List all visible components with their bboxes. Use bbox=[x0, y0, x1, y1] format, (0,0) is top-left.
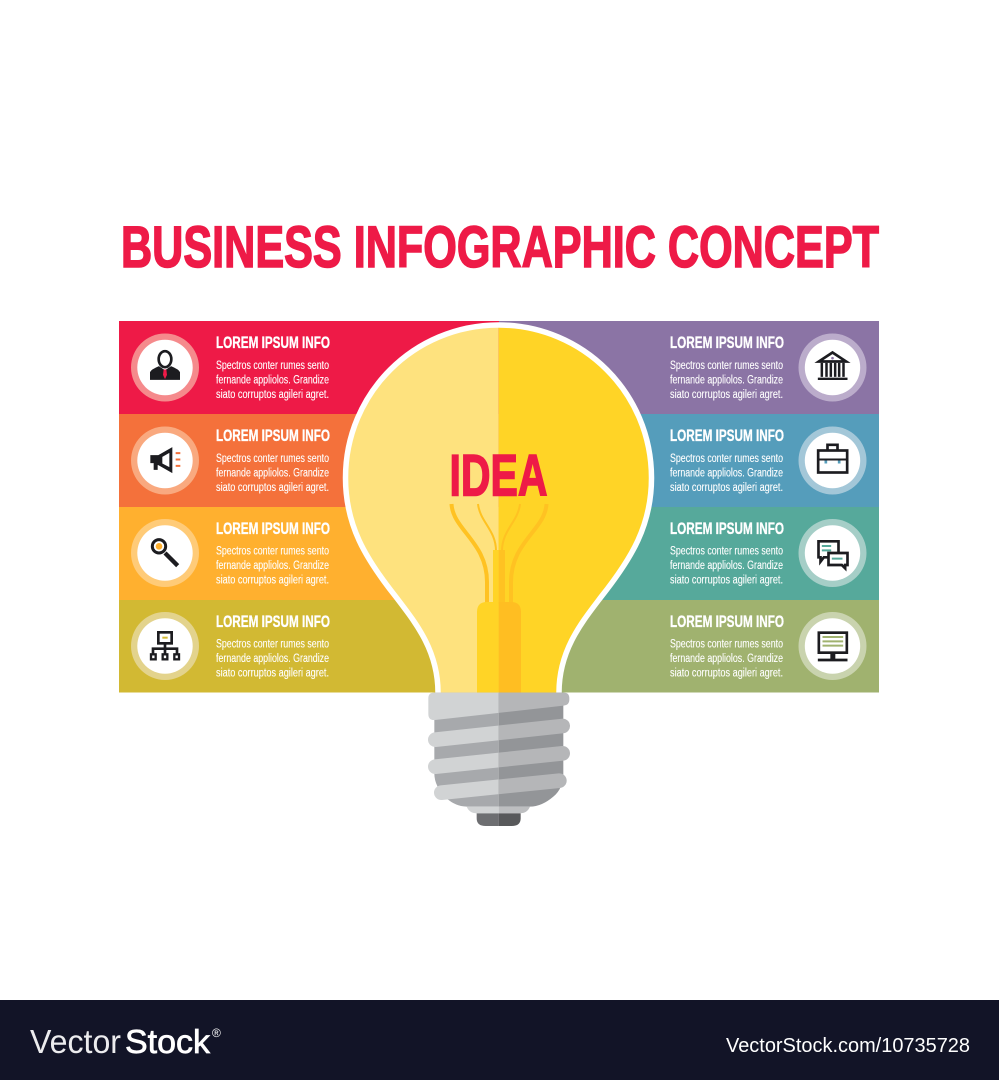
text: right row 3: siato corruptos agileri agret. bbox=[670, 574, 783, 586]
text: right row 4 bbox=[670, 613, 784, 680]
text: row 3: siato corruptos agileri agret. bbox=[216, 574, 329, 586]
icon: megaphone bbox=[150, 447, 180, 473]
bulb stem bbox=[477, 602, 521, 692]
text: row 1: LOREM IPSUM INFO bbox=[216, 334, 330, 352]
text: right row 1: Spectros conter rumes sento bbox=[670, 360, 783, 372]
text: row 3 bbox=[216, 520, 330, 586]
ring badge bbox=[131, 334, 199, 402]
text: row 4: fernande appliolos. Grandize bbox=[216, 653, 329, 665]
text: right row 4: Spectros conter rumes sento bbox=[670, 638, 783, 650]
text: right row 1 bbox=[670, 334, 784, 401]
text: row 1 bbox=[216, 334, 330, 401]
ring badge bbox=[131, 426, 199, 494]
panel: right row 3 teal bbox=[499, 507, 879, 600]
text: right row 1: LOREM IPSUM INFO bbox=[670, 334, 784, 352]
panel: right row 1 purple bbox=[499, 321, 879, 414]
icon: magnifier bbox=[152, 540, 178, 566]
text: right row 4: siato corruptos agileri agret. bbox=[670, 668, 783, 680]
text: right row 3: fernande appliolos. Grandize bbox=[670, 560, 783, 572]
ring badge bbox=[798, 426, 866, 494]
footer logo bbox=[30, 1023, 221, 1060]
icon: monitor bbox=[818, 633, 847, 660]
footer logo: Vector bbox=[30, 1023, 121, 1060]
ring badge bbox=[798, 612, 866, 680]
text: row 3: fernande appliolos. Grandize bbox=[216, 560, 329, 572]
icon: bank bbox=[818, 353, 847, 379]
text: row 3: Spectros conter rumes sento bbox=[216, 546, 329, 558]
text: right row 1: siato corruptos agileri agret. bbox=[670, 389, 783, 401]
light bulb glass bbox=[346, 325, 652, 692]
filament bbox=[452, 504, 546, 604]
text: row 1: Spectros conter rumes sento bbox=[216, 360, 329, 372]
text: right row 2: LOREM IPSUM INFO bbox=[670, 427, 784, 445]
text: right row 3 bbox=[670, 520, 784, 586]
text: right row 1: fernande appliolos. Grandize bbox=[670, 374, 783, 386]
footer logo: ® bbox=[212, 1026, 221, 1040]
footer image id: VectorStock.com/10735728 bbox=[726, 1035, 970, 1057]
panel: left row 1 red bbox=[119, 321, 499, 414]
text: right row 2: Spectros conter rumes sento bbox=[670, 453, 783, 465]
text: row 2: Spectros conter rumes sento bbox=[216, 453, 329, 465]
text: row 4 bbox=[216, 613, 330, 680]
ring badge bbox=[798, 334, 866, 402]
text: row 4: siato corruptos agileri agret. bbox=[216, 668, 329, 680]
text: row 2: LOREM IPSUM INFO bbox=[216, 427, 330, 445]
text: row 3: LOREM IPSUM INFO bbox=[216, 520, 330, 538]
text: right row 2 bbox=[670, 427, 784, 494]
text: right row 2: siato corruptos agileri agret. bbox=[670, 482, 783, 494]
ring badge bbox=[131, 612, 199, 680]
text: right row 3: Spectros conter rumes sento bbox=[670, 546, 783, 558]
panel: left row 3 amber bbox=[119, 507, 499, 600]
panel: left row 2 orange bbox=[119, 414, 499, 507]
text: right row 4: LOREM IPSUM INFO bbox=[670, 613, 784, 631]
footer logo: Stock bbox=[125, 1023, 210, 1060]
text: row 2 bbox=[216, 427, 330, 494]
text: row 4: Spectros conter rumes sento bbox=[216, 638, 329, 650]
idea label: IDEA bbox=[450, 444, 548, 508]
text: row 1: siato corruptos agileri agret. bbox=[216, 389, 329, 401]
icon: businessman bbox=[150, 351, 180, 380]
icon: briefcase bbox=[818, 445, 847, 472]
text: row 4: LOREM IPSUM INFO bbox=[216, 613, 330, 631]
ring badge bbox=[131, 519, 199, 587]
panel: right row 2 blue bbox=[499, 414, 879, 507]
panel: right row 4 green bbox=[499, 600, 879, 692]
text: right row 3: LOREM IPSUM INFO bbox=[670, 520, 784, 538]
icon: chat bubbles bbox=[819, 541, 847, 568]
text: right row 2: fernande appliolos. Grandize bbox=[670, 468, 783, 480]
screw base bbox=[428, 693, 569, 826]
text: row 2: siato corruptos agileri agret. bbox=[216, 482, 329, 494]
text: row 2: fernande appliolos. Grandize bbox=[216, 468, 329, 480]
ring badge bbox=[798, 519, 866, 587]
text: right row 4: fernande appliolos. Grandize bbox=[670, 653, 783, 665]
panel: left row 4 olive bbox=[119, 600, 499, 692]
footer bar bbox=[0, 1000, 999, 1080]
icon: org chart bbox=[151, 632, 179, 659]
text: row 1: fernande appliolos. Grandize bbox=[216, 374, 329, 386]
